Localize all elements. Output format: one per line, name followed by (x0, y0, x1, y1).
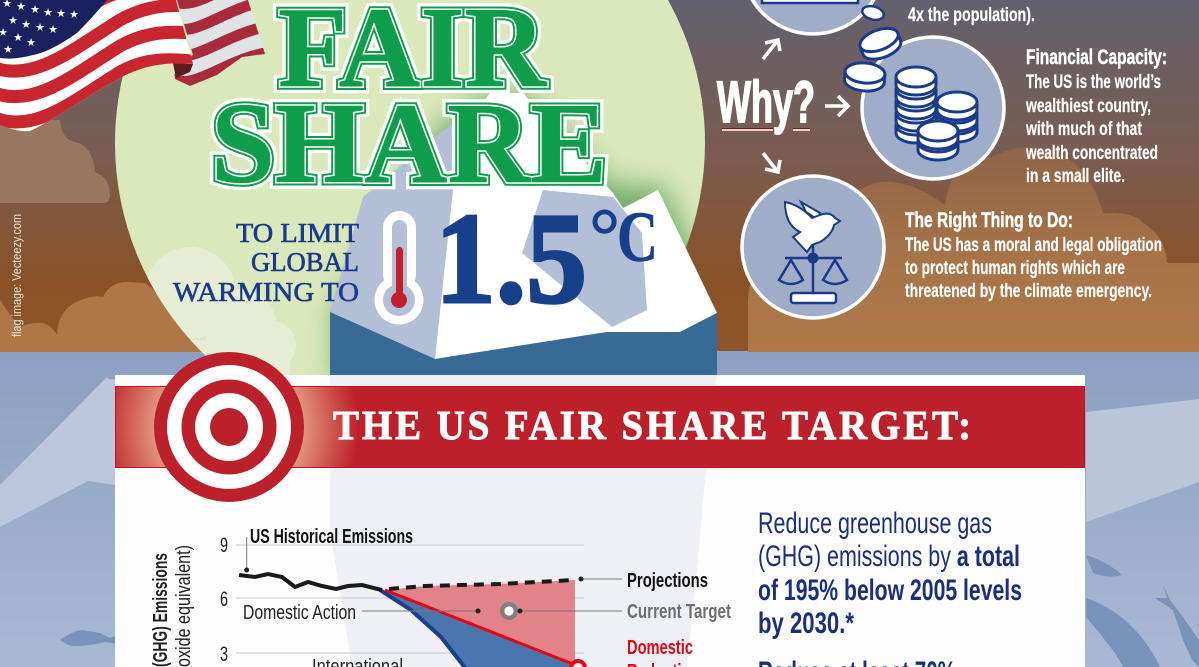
cloud right (748, 147, 1199, 352)
sky background (0, 0, 1199, 352)
Why underline (722, 128, 810, 130)
flag canton (0, 0, 107, 59)
title SHARE: SHARE (211, 80, 607, 207)
text: financial capacity: in a small elite. (1026, 166, 1125, 187)
text: target statement: (GHG) emissions by a total (758, 540, 1020, 573)
flag front: ★ (13, 31, 23, 44)
label: domestic action: Domestic Action (243, 602, 356, 624)
label: projections: Projections (627, 570, 708, 592)
credit: flag image: Vecteezy.com (9, 214, 24, 337)
chart: emissions (150, 526, 731, 667)
label: projections (578, 570, 708, 592)
band heading: THE US FAIR SHARE TARGET: (333, 402, 974, 448)
flag fold shadow (173, 63, 193, 78)
water background (0, 351, 1199, 667)
iceberg underwater base (330, 312, 717, 375)
panel: target card (115, 352, 1085, 667)
title band (116, 386, 1084, 468)
title SHARE: SHARE (211, 80, 607, 207)
y axis title (150, 545, 195, 667)
icon: target (154, 352, 304, 502)
big number 1.5 C: C (617, 197, 658, 277)
Why heading: Why? (717, 70, 815, 135)
big number 1.5 C: 1.5 (435, 187, 587, 331)
icon: coins (844, 4, 1004, 179)
title SHARE: SHARE (211, 80, 607, 207)
text: target statement: Reduce greenhouse gas (758, 507, 992, 540)
projection line (389, 580, 574, 589)
glow behind iceberg (340, 100, 717, 375)
axis labels (220, 534, 228, 666)
axis labels: 9 (220, 534, 228, 557)
icon: thermometer (374, 211, 424, 324)
text: financial capacity: with much of that (1025, 119, 1142, 140)
arrow down (763, 153, 780, 172)
flag front: ★ (30, 3, 40, 16)
text: target statement: of 195% below 2005 levels (758, 574, 1022, 607)
flag front: ★ (26, 36, 36, 49)
subtitle (173, 218, 360, 307)
text: financial capacity: wealthiest country, (1025, 96, 1151, 117)
Why underline white (722, 129, 810, 131)
text: right thing (905, 209, 1162, 302)
historical line (239, 574, 382, 590)
arrow right (825, 96, 848, 116)
underwater iceberg right (1086, 399, 1199, 522)
axis labels: 6 (220, 588, 228, 611)
why section (717, 0, 1167, 318)
icon: top circle (742, 0, 884, 34)
axis labels: 3 (220, 643, 228, 666)
flag front: ★ (8, 14, 18, 27)
big number 1.5 C: ° (589, 192, 620, 279)
label: domestic reductions (571, 637, 708, 667)
iceberg (330, 93, 717, 375)
flag (0, 0, 270, 135)
card underwater tint (330, 375, 717, 667)
international area (382, 590, 578, 667)
flag front: ★ (48, 23, 58, 36)
text: population: 4x the population). (908, 5, 1035, 26)
flag front: ★ (69, 8, 79, 21)
label: domestic reductions: Domestic (627, 637, 693, 659)
underwater iceberg left (0, 378, 115, 527)
flag front: ★ (56, 7, 66, 20)
flag front: ★ (43, 6, 53, 19)
label: domestic action (243, 602, 480, 624)
text: financial capacity (1025, 46, 1167, 187)
international line (380, 590, 470, 667)
arrow up (763, 40, 780, 59)
text: right thing: The Right Thing to Do: (905, 209, 1073, 232)
fish group (60, 555, 1199, 667)
title SHARE: SHARE (211, 80, 607, 207)
domestic line (385, 590, 578, 666)
marker: current target (502, 601, 731, 623)
subtitle: WARMING TO (173, 277, 359, 307)
flag front (0, 0, 200, 135)
flag back fold (173, 0, 265, 86)
chart grid (236, 545, 584, 653)
text: target statement: by 2030.* (758, 607, 854, 640)
pale cloud in circle (144, 247, 296, 376)
flag front: ★ (35, 21, 45, 34)
label: historical (244, 526, 413, 572)
iceberg shadow facet (522, 190, 647, 327)
flag front: ★ (3, 43, 13, 56)
green sun circle (115, 0, 705, 438)
icon: dove and scales (742, 176, 884, 318)
subtitle: GLOBAL (251, 247, 359, 277)
reductions area (385, 580, 575, 664)
text: target statement (758, 507, 1022, 667)
flag front: ★ (21, 18, 31, 31)
marker: current target: Current Target (627, 601, 731, 623)
iceberg white face (435, 93, 717, 359)
clouds left (0, 120, 230, 352)
flag front: ★ (16, 0, 26, 13)
y axis title: oxide equivalent) (173, 545, 195, 667)
subtitle: TO LIMIT (236, 218, 360, 248)
label: historical: US Historical Emissions (250, 526, 413, 548)
y axis title: (GHG) Emissions (150, 553, 172, 667)
iceberg back facet (330, 100, 650, 359)
